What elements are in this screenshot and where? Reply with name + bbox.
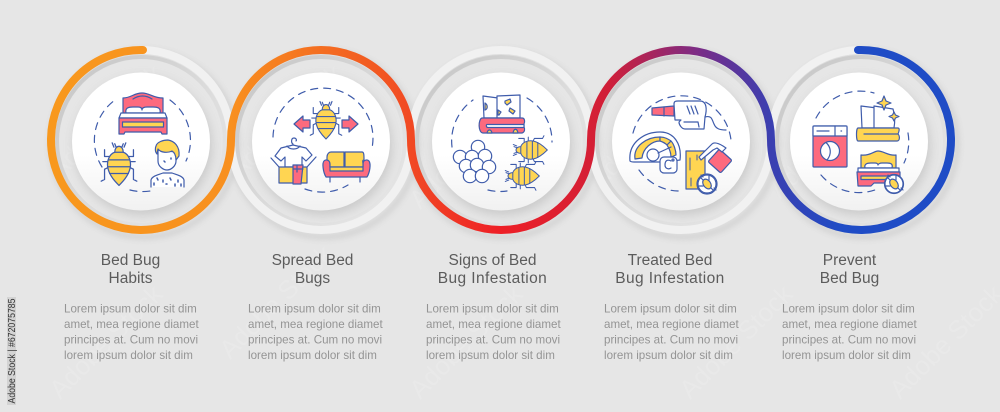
heading: Bugs xyxy=(295,270,330,287)
text block: Lorem ipsum dolor sit dim xyxy=(64,302,197,316)
panel: Bed Bug Habits xyxy=(64,72,212,362)
text block: lorem ipsum dolor sit dim xyxy=(604,349,733,362)
icon: washer, clean bedding and bed xyxy=(813,91,909,194)
disc 2 xyxy=(252,72,390,210)
stock credit: Adobe Stock | #672075785 xyxy=(7,298,18,404)
watermark: Adobe Stock xyxy=(583,68,709,194)
text block: Lorem ipsum dolor sit dim xyxy=(426,302,559,316)
text block: principes at. Cum no movi xyxy=(248,334,382,346)
text block: principes at. Cum no movi xyxy=(426,334,560,346)
text block: amet, mea regione diamet xyxy=(426,318,561,331)
watermark: Adobe Stock xyxy=(763,78,889,204)
disc 3 xyxy=(432,72,570,210)
heading: Prevent xyxy=(823,252,876,269)
light ring track xyxy=(143,50,858,230)
disc 1 xyxy=(72,72,210,210)
text block: principes at. Cum no movi xyxy=(64,334,198,346)
icon: stained bedding, eggs and bugs xyxy=(452,95,552,191)
heading: Treated Bed xyxy=(628,252,712,269)
text block: lorem ipsum dolor sit dim xyxy=(426,349,555,362)
watermark: Adobe Stock xyxy=(673,278,799,404)
gradient ribbon connecting the five steps xyxy=(51,50,951,230)
heading: Bug Infestation xyxy=(615,270,725,287)
heading: Signs of Bed xyxy=(449,252,536,269)
disc 4 xyxy=(612,72,750,210)
heading: Spread Bed xyxy=(272,252,353,269)
panel: Spread Bed Bugs xyxy=(248,72,392,362)
watermark: Adobe Stock xyxy=(43,278,169,404)
watermark: Adobe Stock xyxy=(403,278,529,404)
heading: Bed Bug xyxy=(101,252,160,269)
text block: amet, mea regione diamet xyxy=(782,318,917,331)
text block: principes at. Cum no movi xyxy=(782,334,916,346)
watermark: Adobe Stock xyxy=(403,88,529,214)
watermark: Adobe Stock xyxy=(223,58,349,184)
text block: amet, mea regione diamet xyxy=(604,318,739,331)
ring shadows xyxy=(51,51,957,237)
watermark: Adobe Stock xyxy=(213,238,339,364)
text block: Lorem ipsum dolor sit dim xyxy=(248,302,381,316)
text block: lorem ipsum dolor sit dim xyxy=(782,349,911,362)
panel: Signs of Bed Bug Infestation xyxy=(426,72,572,362)
icon: bed, bug and person xyxy=(94,93,190,192)
disc 5 xyxy=(790,72,928,210)
heading: Bed Bug xyxy=(820,270,879,287)
text block: amet, mea regione diamet xyxy=(64,318,199,331)
panel: Prevent Bed Bug xyxy=(782,72,930,362)
text block: Lorem ipsum dolor sit dim xyxy=(604,302,737,316)
icon: bug, arrows, clothes and sofa xyxy=(271,88,373,192)
icon: heat gun, gauge and spray xyxy=(630,96,732,194)
heading: Habits xyxy=(109,270,153,287)
text block: amet, mea regione diamet xyxy=(248,318,383,331)
heading: Bug Infestation xyxy=(438,270,547,287)
text block: principes at. Cum no movi xyxy=(604,334,738,346)
text block: lorem ipsum dolor sit dim xyxy=(248,349,377,362)
text block: Lorem ipsum dolor sit dim xyxy=(782,302,915,316)
watermark: Adobe Stock xyxy=(43,58,169,184)
panel: Treated Bed Bug Infestation xyxy=(604,72,752,362)
text block: lorem ipsum dolor sit dim xyxy=(64,349,193,362)
